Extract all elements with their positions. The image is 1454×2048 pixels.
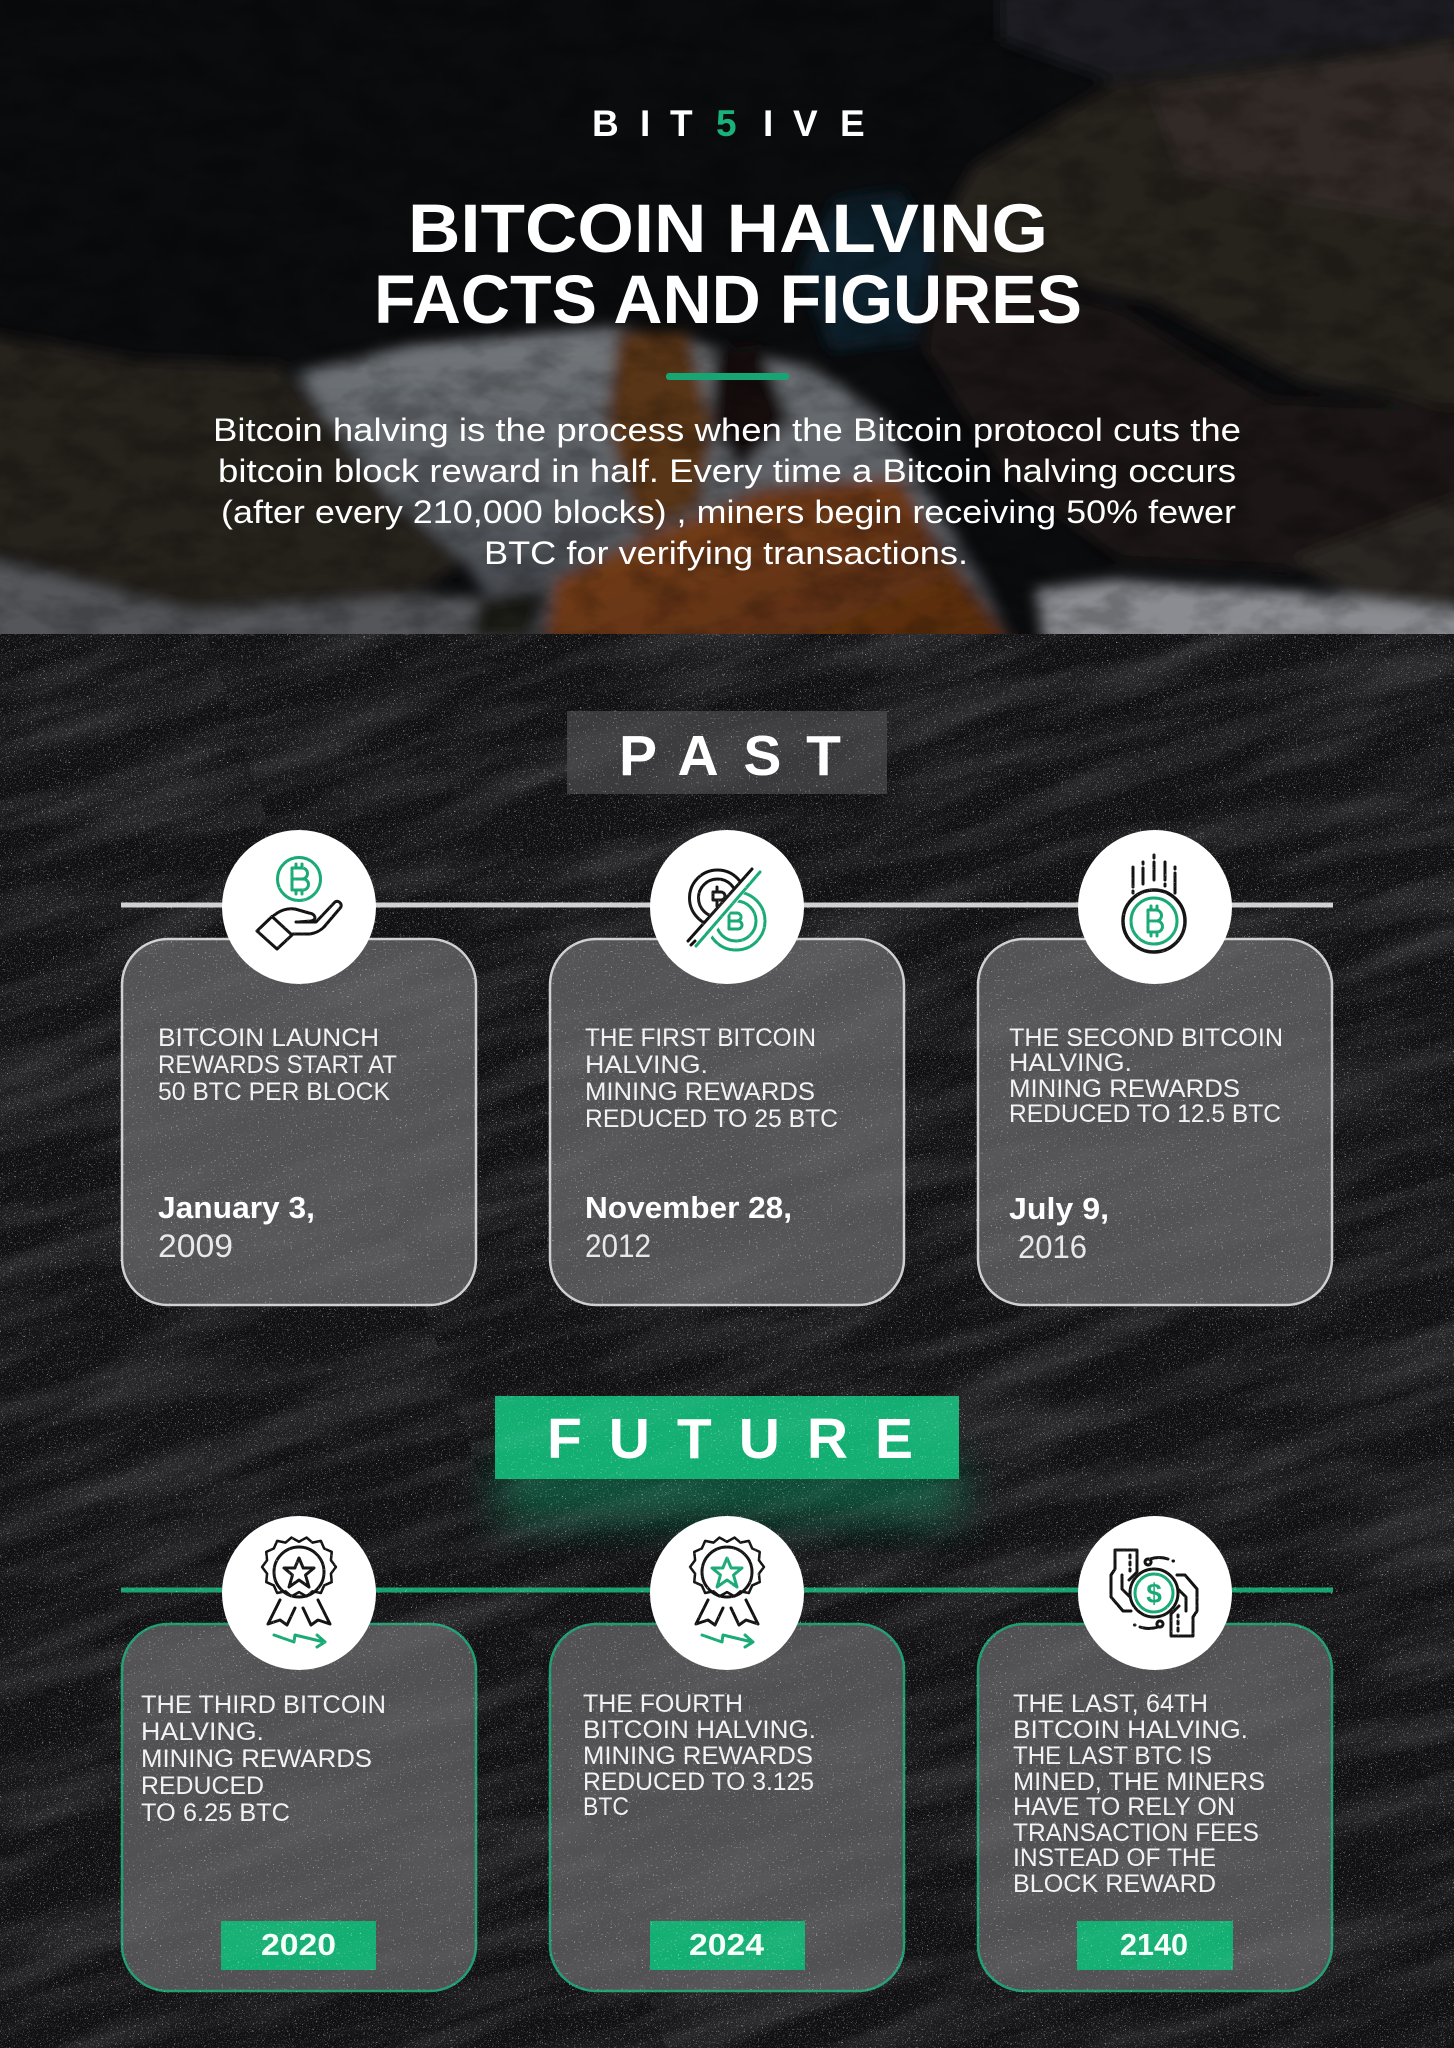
header photo [0, 0, 1454, 680]
textured sand background [0, 634, 1454, 2048]
icon: hands exchanging dollar coin: $ [1146, 1578, 1162, 1609]
card 3 description: HALVING. [1009, 1049, 1132, 1077]
intro paragraph: BTC for verifying transactions. [484, 535, 968, 571]
card 1 date: January 3, [158, 1190, 315, 1225]
panel: past card 3 [978, 939, 1332, 1305]
sand texture overlay [0, 634, 1454, 2048]
icon: falling coin [1078, 830, 1232, 984]
icon: hand holding bitcoin [222, 830, 376, 984]
card 1 description [158, 1024, 397, 1106]
past heading badge: PAST [619, 724, 841, 788]
card 3 description: MINING REWARDS [1009, 1075, 1240, 1103]
future card 3 description [1013, 1690, 1265, 1898]
future card 2 description: BITCOIN HALVING. [583, 1716, 816, 1744]
card 1 description: REWARDS START AT [158, 1051, 397, 1079]
icon: halved coin [650, 830, 804, 984]
future card 2 description: MINING REWARDS [583, 1742, 813, 1770]
card 3 description: THE SECOND BITCOIN [1009, 1024, 1283, 1052]
card 2 description: MINING REWARDS [585, 1078, 815, 1106]
future card 3 description: BITCOIN HALVING. [1013, 1716, 1248, 1744]
card 2 date [585, 1190, 792, 1264]
title underline [666, 373, 789, 380]
future card 1 description: REDUCED [141, 1772, 264, 1800]
card 2 description: REDUCED TO 25 BTC [585, 1105, 838, 1133]
intro paragraph: (after every 210,000 blocks) , miners begin receiving 50% fewer [221, 494, 1236, 530]
panel: future card 2 [550, 1624, 904, 1991]
future card 3 description: THE LAST BTC IS [1013, 1742, 1212, 1770]
future card 1 description: MINING REWARDS [141, 1745, 372, 1773]
card 1 description: BITCOIN LAUNCH [158, 1024, 379, 1052]
intro paragraph: bitcoin block reward in half. Every time a Bitcoin halving occurs [218, 453, 1236, 489]
future card 1 description: THE THIRD BITCOIN [141, 1691, 386, 1719]
future card 2 description [583, 1690, 816, 1821]
title: BITCOIN HALVING [408, 190, 1048, 267]
title [374, 190, 1082, 338]
card 1 date: 2009 [158, 1228, 233, 1264]
future card 2 description: THE FOURTH [583, 1690, 743, 1718]
card 3 date [1009, 1191, 1109, 1265]
card 3 description [1009, 1024, 1283, 1128]
card 1 description: 50 BTC PER BLOCK [158, 1078, 390, 1106]
panel: past card 1 [122, 939, 476, 1305]
future card 3 description: THE LAST, 64TH [1013, 1690, 1208, 1718]
title: FACTS AND FIGURES [374, 261, 1082, 338]
year tag 2020 [221, 1921, 376, 1970]
year tag 2024 [650, 1921, 805, 1970]
future card 2 description: BTC [583, 1793, 629, 1821]
future heading badge: FUTURE [547, 1407, 913, 1471]
card 2 description [585, 1024, 838, 1133]
year tag 2020: 2020 [261, 1927, 336, 1962]
card 2 description: THE FIRST BITCOIN [585, 1024, 816, 1052]
icon: hands exchanging dollar coin [1078, 1516, 1232, 1670]
future heading badge [495, 1396, 959, 1479]
future card 3 description: HAVE TO RELY ON [1013, 1793, 1235, 1821]
year tag 2140: 2140 [1120, 1927, 1188, 1962]
card 2 date: 2012 [585, 1228, 651, 1264]
panel: past card 2 [550, 939, 904, 1305]
card 2 description: HALVING. [585, 1051, 708, 1079]
future card 3 description: MINED, THE MINERS [1013, 1768, 1265, 1796]
future timeline line [121, 1588, 1333, 1592]
panel: future card 3 [978, 1624, 1332, 1991]
card 3 date: July 9, [1009, 1191, 1109, 1226]
card 2 date: November 28, [585, 1190, 792, 1225]
icon: award ribbon green star [650, 1516, 804, 1670]
future card 3 description: BLOCK REWARD [1013, 1870, 1216, 1898]
logo: BIT 5 IVE [592, 103, 865, 144]
future glow [500, 1460, 960, 1520]
card 1 date [158, 1190, 315, 1264]
past heading badge [567, 711, 887, 794]
intro paragraph: Bitcoin halving is the process when the Bitcoin protocol cuts the [213, 412, 1241, 448]
future card 1 description: HALVING. [141, 1718, 264, 1746]
future card 1 description [141, 1691, 386, 1827]
year tag 2024: 2024 [689, 1927, 765, 1962]
card 3 description: REDUCED TO 12.5 BTC [1009, 1100, 1281, 1128]
future card 2 description: REDUCED TO 3.125 [583, 1768, 814, 1796]
panel: future card 1 [122, 1624, 476, 1991]
past timeline line [121, 902, 1333, 908]
future card 1 description: TO 6.25 BTC [141, 1799, 290, 1827]
card 3 date: 2016 [1018, 1229, 1087, 1265]
future card 3 description: TRANSACTION FEES [1013, 1819, 1259, 1847]
year tag 2140 [1077, 1921, 1233, 1970]
intro paragraph [213, 412, 1241, 571]
future card 3 description: INSTEAD OF THE [1013, 1844, 1216, 1872]
icon: award ribbon black star [222, 1516, 376, 1670]
